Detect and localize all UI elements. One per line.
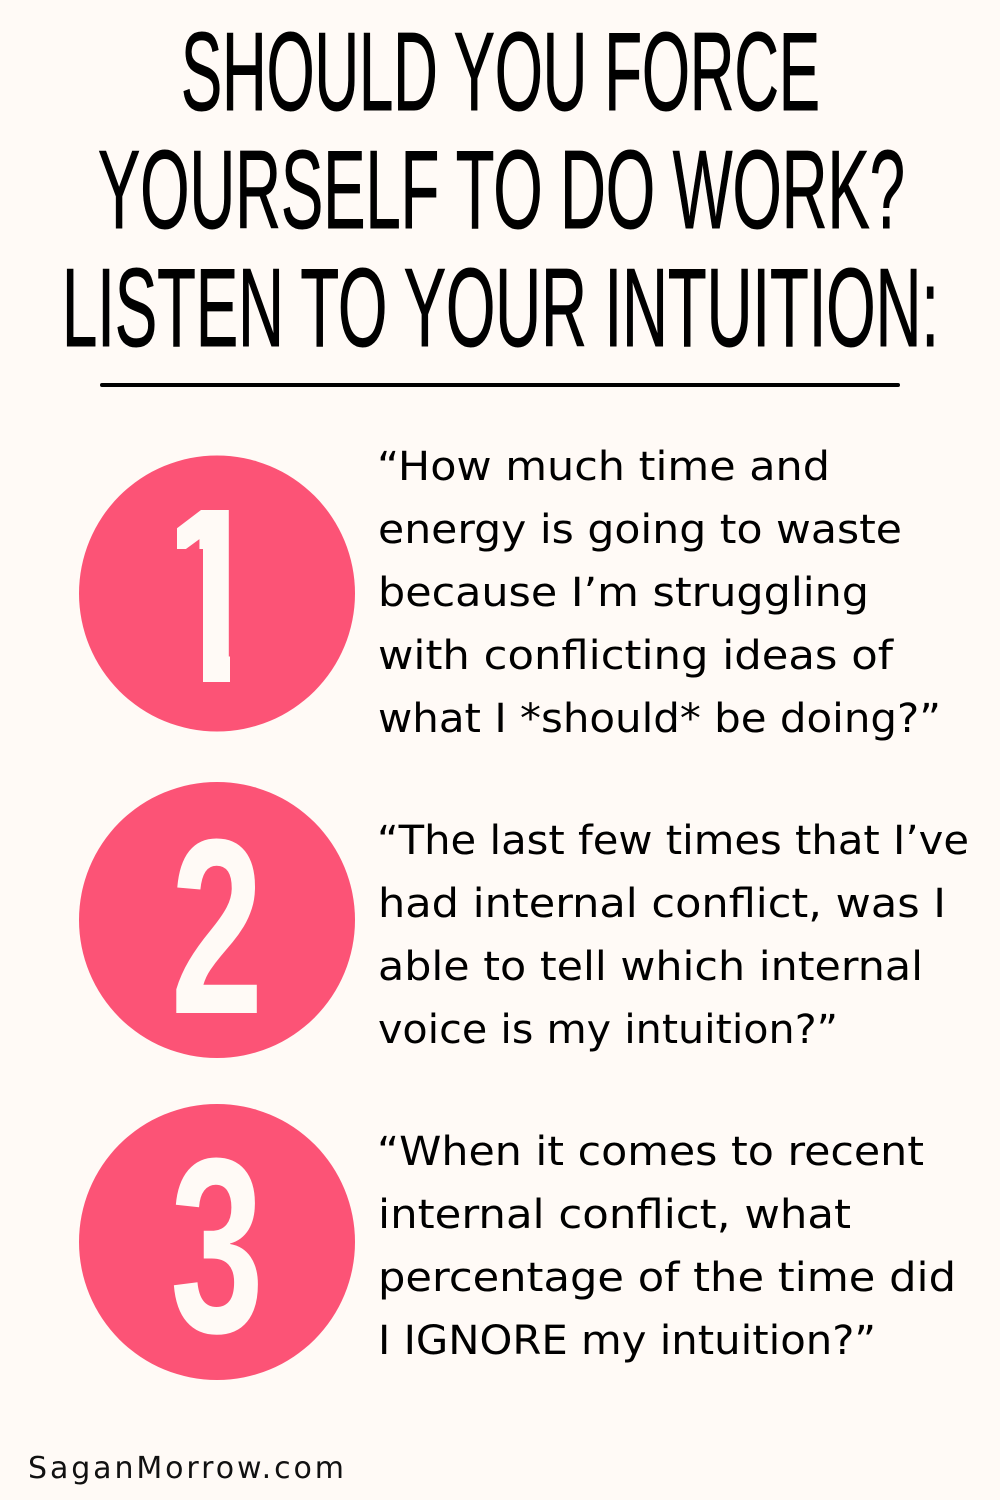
number badge 3: 3 <box>170 1106 264 1385</box>
question 1 text: because I’m struggling <box>378 570 869 616</box>
question 3 text <box>377 1129 956 1364</box>
question 1 text: energy is going to waste <box>378 507 902 553</box>
question 1 text: what I *should* be doing?” <box>378 696 941 742</box>
question 2 text: had internal conflict, was I <box>378 881 946 927</box>
footer website: SaganMorrow.com <box>28 1451 344 1486</box>
question 2 text <box>377 818 969 1053</box>
title <box>62 10 939 370</box>
question 1 text <box>377 444 941 742</box>
number badge 2: 2 <box>170 787 264 1066</box>
question 2 text: voice is my intuition?” <box>378 1007 838 1053</box>
item 1 <box>79 444 941 742</box>
question 3 text: “When it comes to recent <box>377 1129 924 1175</box>
item 2 <box>79 782 969 1066</box>
question 3 text: I IGNORE my intuition?” <box>378 1318 876 1364</box>
question 1 text: “How much time and <box>377 444 830 490</box>
question 3 text: percentage of the time did <box>378 1255 956 1301</box>
number badge 1 <box>79 456 355 735</box>
question 2 text: able to tell which internal <box>378 944 923 990</box>
number badge 1: 1 <box>150 456 268 735</box>
number badge 2 <box>79 782 355 1066</box>
question 1 text: with conflicting ideas of <box>378 633 894 679</box>
question 3 text: internal conflict, what <box>378 1192 851 1238</box>
number badge 3 <box>79 1104 355 1385</box>
item 3 <box>79 1104 956 1385</box>
question 2 text: “The last few times that I’ve <box>377 818 969 864</box>
